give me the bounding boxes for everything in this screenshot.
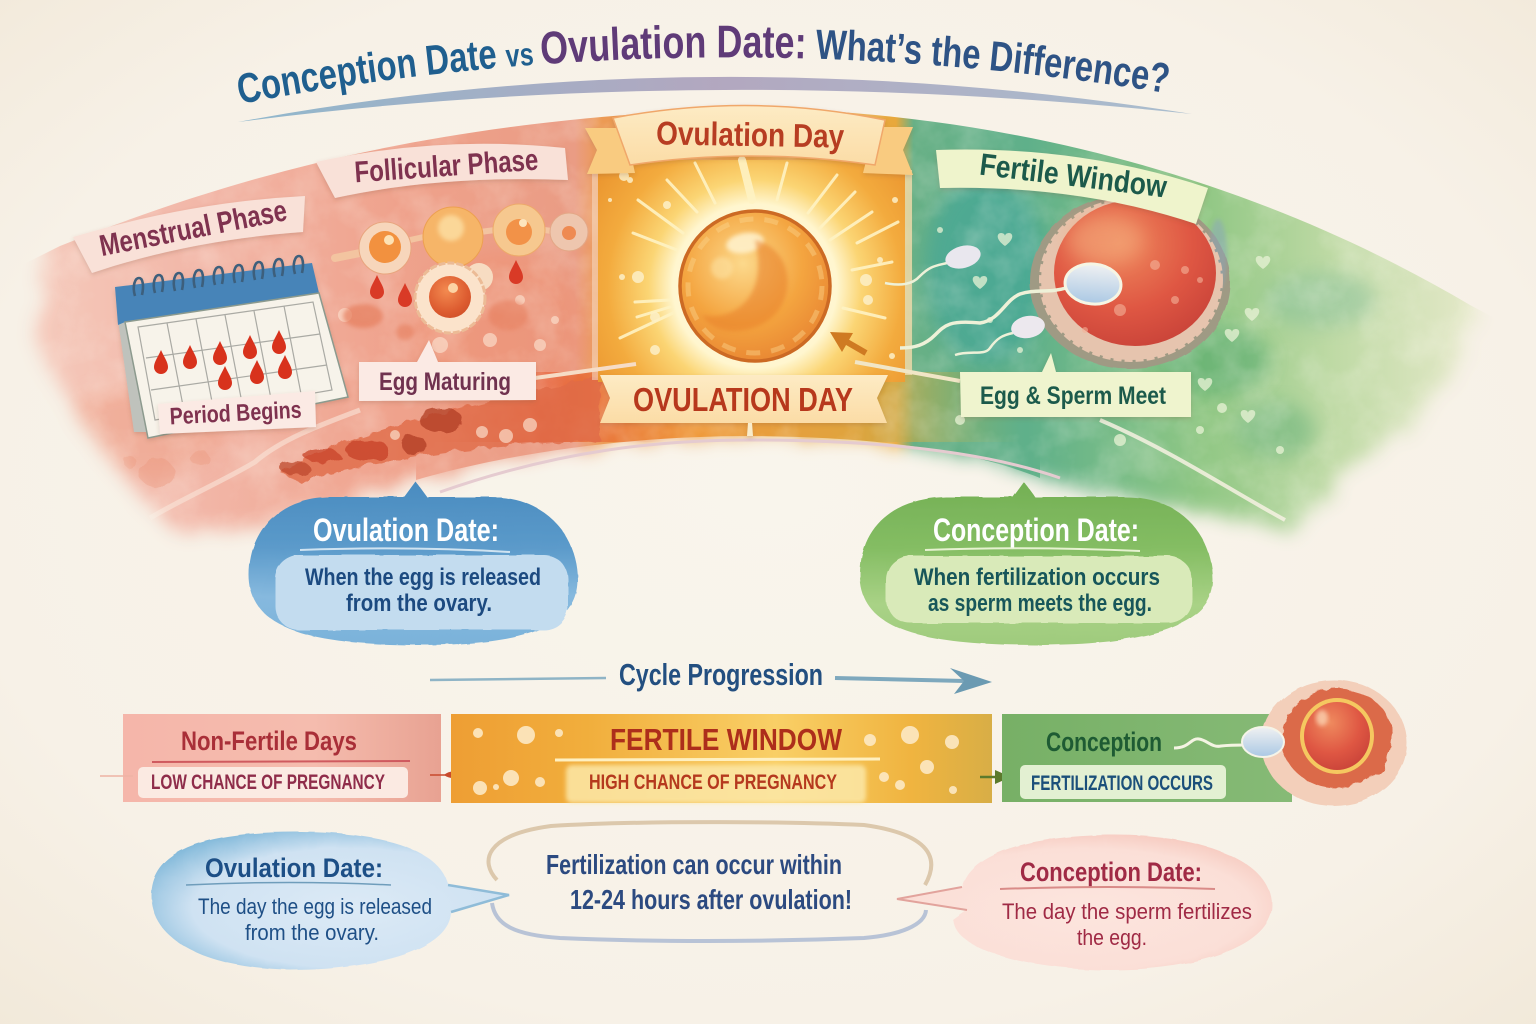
panel: fertile window [451,714,1011,803]
bubble: conception date: the egg. [1077,925,1147,950]
red blotch stream [124,378,600,487]
label: menstrual phase: Menstrual Phase [97,194,290,263]
bubble: fertilization note [488,822,931,941]
bubble: ovulation date: Ovulation Date: [205,853,383,883]
cycle arc band [28,112,1481,542]
label: egg maturing [359,340,536,401]
bubble: conception date: Conception Date: [1020,857,1202,887]
label: egg maturing: Egg Maturing [379,368,511,396]
ribbon: ovulation day label [600,375,888,436]
heading: cycle progression: Cycle Progression [619,657,823,692]
bubble: fertilization note: Fertilization can occur within [546,849,842,880]
panel: fertile window: FERTILE WINDOW [610,722,843,757]
icon: maturing follicles [335,204,588,340]
panel: conception: FERTILIZATION OCCURS [1031,772,1213,795]
connector: follicular to ribbon [535,364,636,378]
callout: conception date: as sperm meets the egg. [928,590,1152,617]
label: menstrual phase [73,194,305,273]
icon: fertilized egg [1174,680,1407,806]
label: follicular phase: Follicular Phase [353,144,539,189]
label: follicular phase [316,144,568,198]
title: Conception Date vs Ovulation Date: What’s the Difference? [238,25,1169,102]
label: egg and sperm meet [960,353,1191,417]
panel: conception [1002,680,1407,806]
bubble: fertilization note: 12-24 hours after ovulation! [570,884,852,915]
callout: conception date: Conception Date: [933,512,1139,548]
panel: ovulation day sunburst [592,160,912,382]
bubble: conception date: The day the sperm fertilizes [1002,899,1252,924]
label: fertile window [936,147,1208,224]
bubble: ovulation date: The day the egg is released [198,894,432,919]
icon: ovulated egg [680,211,830,361]
panel: non-fertile days [100,714,464,802]
lower arc line [440,440,1060,492]
ribbon: ovulation day heading [585,105,913,175]
ribbon: ovulation day label: OVULATION DAY [633,381,853,418]
callout: ovulation date: Ovulation Date: [313,512,499,548]
callout: ovulation date: from the ovary. [346,590,492,617]
arrow: toward ovulation [830,332,960,381]
bubble: ovulation date: from the ovary. [245,920,379,945]
icon: calendar [115,256,348,438]
label: egg and sperm meet: Egg & Sperm Meet [980,382,1167,410]
panel: fertile window: HIGH CHANCE OF PREGNANCY [589,771,837,794]
callout: conception date [860,482,1213,645]
label: fertile window: Fertile Window [978,147,1169,204]
panel: non-fertile days: Non-Fertile Days [181,726,357,756]
icon: fertilized egg with sperm [1030,195,1230,369]
callout: conception date: When fertilization occurs [914,564,1160,591]
icon: sperm cells [885,242,1123,355]
bubble: ovulation date [151,832,509,970]
ribbon: ovulation day heading: Ovulation Day [656,114,845,155]
panel: conception: Conception [1046,727,1162,757]
label: period begins: Period Begins [169,397,302,430]
bubble: conception date [897,835,1272,970]
callout: ovulation date [249,482,578,645]
heading: cycle progression [430,657,992,694]
panel: non-fertile days: LOW CHANCE OF PREGNANCY [151,771,385,794]
callout: ovulation date: When the egg is released [305,564,541,591]
